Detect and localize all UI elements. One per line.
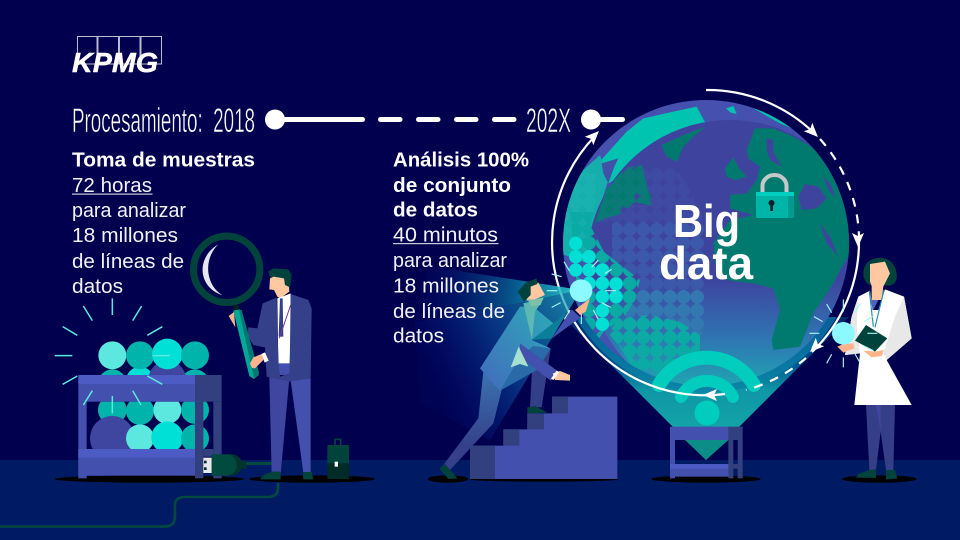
crescent dots (566, 172, 582, 216)
jacket (480, 307, 553, 391)
man with magnifier (193, 236, 375, 483)
orb (832, 322, 855, 345)
text block: full analysis: de líneas de (393, 300, 505, 323)
woman shadow (842, 475, 917, 483)
lock icon (756, 175, 794, 218)
rays (809, 299, 877, 367)
light beam from orb (413, 266, 581, 440)
text block: sampling: 18 millones (72, 224, 178, 247)
text block: full analysis: para analizar (393, 249, 507, 272)
text block: full analysis: Análisis 100% (393, 150, 529, 172)
ocean dots upper (598, 168, 652, 222)
shoes (856, 469, 876, 478)
big data label: Big (673, 195, 740, 247)
glowing orb held by climbing man (547, 260, 616, 324)
raised arm and hand (552, 309, 581, 339)
trousers (866, 405, 895, 470)
shelf shadow (55, 475, 244, 483)
dot map (565, 165, 704, 375)
shirt and lanyard (870, 300, 878, 310)
glow rays (55, 298, 170, 413)
timeline solid line (275, 117, 365, 122)
text block: sampling: de líneas de (72, 250, 184, 273)
ocean sphere (587, 120, 849, 384)
text block: full analysis: 18 millones (393, 274, 499, 298)
coat (845, 289, 912, 405)
back leg (530, 346, 551, 407)
shirt and tie (277, 293, 291, 364)
balls inside shelf (90, 402, 209, 449)
ocean dots middle (612, 222, 704, 290)
trousers (269, 377, 289, 474)
label: 202X: 202X (526, 102, 571, 140)
stairs (428, 397, 618, 483)
face and neck (870, 262, 890, 300)
hair (863, 258, 897, 286)
lower beam (415, 290, 581, 440)
cone inner band (577, 317, 836, 393)
shelf with data balls (55, 298, 244, 483)
shoes (260, 472, 281, 479)
man climbing stairs (439, 278, 590, 479)
text block: sampling: datos (72, 275, 123, 298)
front leg (443, 372, 502, 470)
text block: full analysis: datos (393, 324, 444, 348)
scientist woman (809, 258, 917, 483)
timeline dashes (378, 117, 516, 122)
globe land and ocean (563, 106, 849, 384)
upper beam (413, 266, 581, 322)
text block: full analysis (393, 150, 529, 348)
bright dots (569, 237, 623, 331)
jacket (247, 294, 312, 382)
head (269, 275, 289, 298)
balls above shelf (98, 338, 209, 375)
usb plug (203, 454, 273, 476)
man shadow (249, 475, 375, 483)
timeline: processing 2018 to 202X (72, 102, 625, 140)
tablet (855, 325, 887, 352)
wifi icon (659, 358, 754, 426)
text block: full analysis: de datos (393, 200, 478, 222)
big data label: data (659, 237, 753, 289)
bright land crescent (563, 106, 792, 263)
text block: full analysis: de conjunto (393, 175, 511, 197)
text block: sampling: 72 horas (72, 174, 152, 197)
label: Procesamiento 2018: Procesamiento: 2018 (72, 102, 255, 140)
shirt and head (523, 298, 544, 340)
north america dots (597, 165, 652, 222)
text block: sampling (72, 150, 255, 298)
usb cable (0, 483, 278, 526)
magnifier (193, 236, 260, 379)
KPMG logo: KPMG (72, 47, 158, 78)
table under cone (651, 427, 761, 483)
floor (0, 460, 960, 540)
text block: full analysis: 40 minutos (393, 224, 498, 246)
text block: sampling: Toma de muestras (72, 150, 255, 172)
hands (837, 343, 855, 353)
timeline start dot (265, 110, 285, 130)
south america dots (608, 315, 700, 375)
globe (563, 100, 849, 384)
big data label (659, 195, 753, 289)
lower arm and hand (520, 343, 558, 381)
power box (327, 439, 349, 479)
timeline end line (591, 117, 625, 122)
dark land (595, 127, 850, 350)
globe base (563, 100, 849, 386)
shelf frame (78, 375, 222, 478)
data cycle ring arrows (552, 90, 864, 401)
timeline end dot (581, 110, 601, 130)
hand and cuff (250, 354, 263, 368)
ocean dots lower (622, 290, 704, 335)
cone under globe (563, 317, 849, 460)
text block: sampling: para analizar (72, 199, 186, 222)
